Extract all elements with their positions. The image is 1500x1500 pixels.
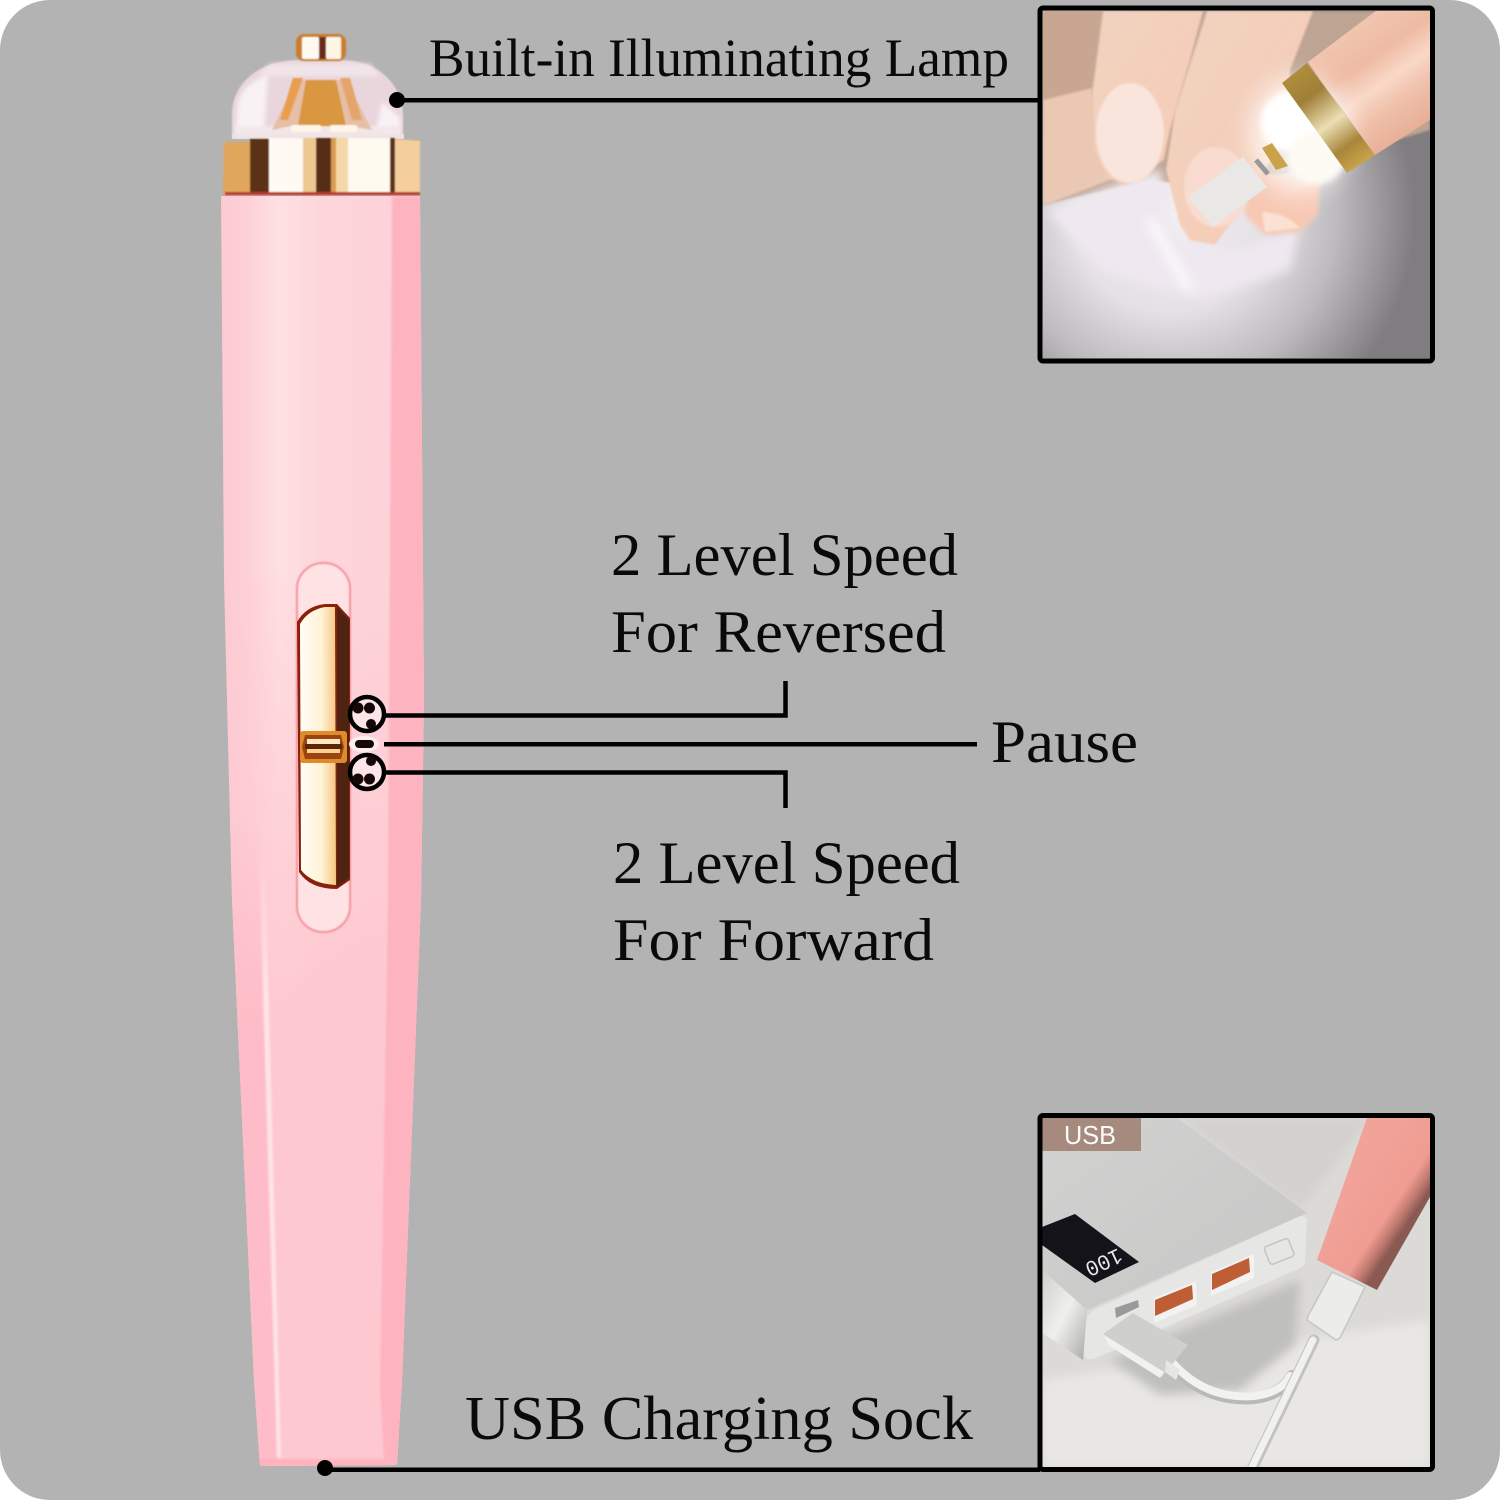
plug at pen <box>1307 1272 1365 1340</box>
hand background <box>1043 11 1430 205</box>
USB port one <box>1154 1281 1197 1323</box>
lamp glow <box>1250 77 1350 193</box>
label: pause: Pause <box>991 709 1138 775</box>
gold band <box>1282 63 1375 173</box>
label: reversed speed <box>611 522 958 665</box>
callout line: lamp <box>389 92 1042 108</box>
panel: lamp photo <box>1040 8 1432 361</box>
nail two <box>1184 147 1248 227</box>
pen body <box>215 190 430 1470</box>
label: forward speed <box>613 830 960 973</box>
gold ring <box>223 138 420 195</box>
callout line: forward speed <box>384 772 786 808</box>
photo frame <box>1040 8 1432 361</box>
power bank top <box>1042 1118 1307 1310</box>
photo frame <box>1040 1116 1432 1470</box>
USB tag: USB <box>1064 1120 1116 1150</box>
gold slider bar <box>297 604 350 889</box>
white drum bit <box>1188 157 1267 227</box>
power bank front <box>1084 1216 1307 1359</box>
finger two <box>1166 11 1313 245</box>
label: lamp: Built-in Illuminating Lamp <box>429 28 1009 88</box>
top gold knob <box>296 34 346 61</box>
panel: USB photo <box>1040 1116 1432 1470</box>
label: reversed speed: 2 Level Speed <box>611 522 958 588</box>
callout line: reversed speed <box>384 681 786 716</box>
power bank side <box>1042 1270 1087 1360</box>
USB-C port <box>1115 1300 1139 1318</box>
battery display <box>1042 1214 1139 1283</box>
callout line: USB charging <box>317 1460 1040 1476</box>
drill collar <box>1262 143 1288 170</box>
speed slider slot <box>297 563 350 932</box>
label: forward speed: 2 Level Speed <box>613 830 960 896</box>
towel folds <box>1046 168 1300 300</box>
USB plug in bank <box>1103 1313 1188 1377</box>
gold bell inside dome <box>272 78 372 132</box>
forward speed dots <box>350 755 384 789</box>
USB port two <box>1211 1254 1254 1296</box>
USB tag <box>1042 1118 1141 1151</box>
cables <box>1172 1340 1314 1467</box>
pink pen in photo <box>1317 1118 1430 1290</box>
pen tip in photo <box>1308 10 1430 155</box>
glass dome <box>232 60 404 139</box>
callout line: pause <box>384 742 977 746</box>
pause dash <box>349 736 379 752</box>
label: reversed speed: For Reversed <box>611 599 946 665</box>
power button <box>1264 1238 1295 1265</box>
label: forward speed: For Forward <box>613 907 934 973</box>
nail one <box>1096 83 1164 183</box>
finger three <box>1245 170 1320 235</box>
label: USB charging: USB Charging Sock <box>465 1385 973 1453</box>
reverse speed dots <box>350 697 384 731</box>
product: pink nail drill pen <box>215 34 430 1470</box>
finger one <box>1092 11 1203 185</box>
battery display: 100 <box>1081 1242 1126 1280</box>
